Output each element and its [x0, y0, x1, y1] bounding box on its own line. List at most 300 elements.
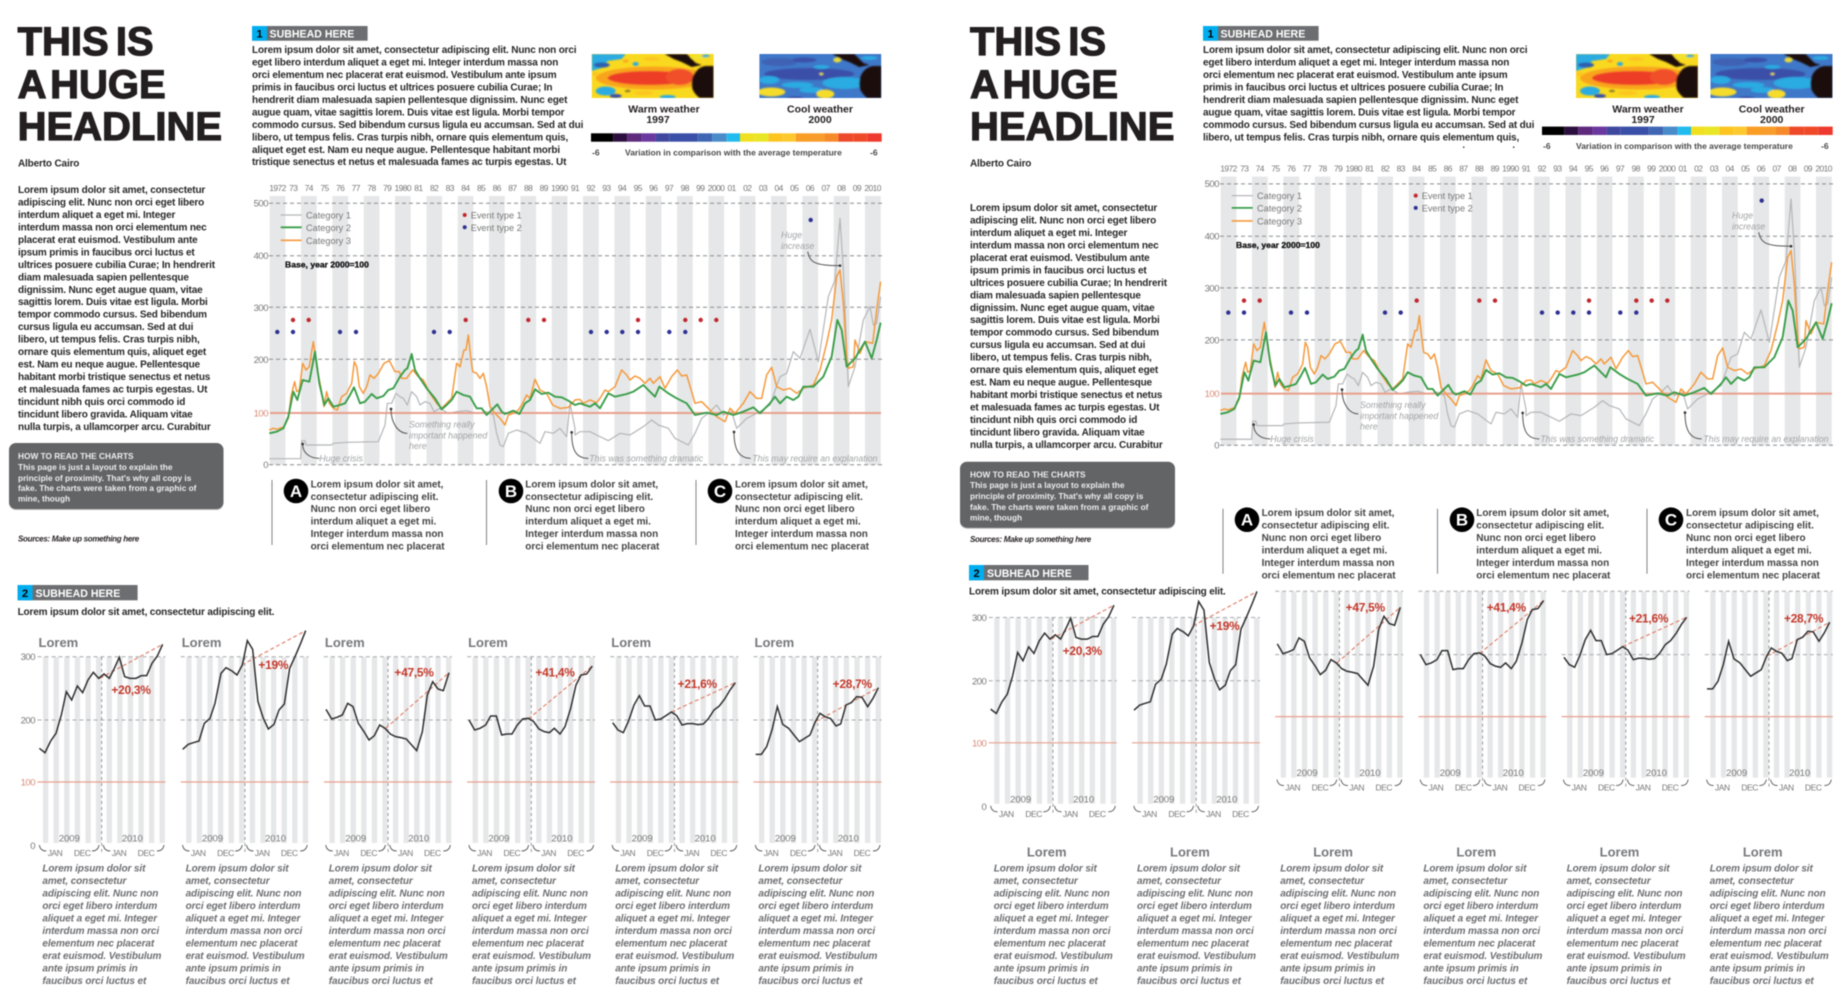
year axis: 92: [587, 183, 596, 193]
body text column: et malesuada fames ac turpis egestas. Ut: [18, 385, 208, 396]
small chart 4: [1418, 591, 1546, 793]
note C: Nunc non orci eget libero: [735, 504, 855, 515]
chart captions: adipiscing elit. Nunc non: [42, 889, 158, 900]
small chart 1: 300: [972, 613, 987, 624]
body text column: libero, ut tempus felis. Cras turpis nibh,: [18, 335, 200, 346]
chart captions: adipiscing elit. Nunc non: [1280, 889, 1396, 900]
chart captions: orci eget libero interdum: [186, 901, 301, 912]
year axis: 08: [1788, 164, 1797, 174]
small chart 3: [324, 635, 452, 858]
note A: consectetur adipiscing elit.: [1262, 520, 1390, 531]
chart captions: interdum massa non orci: [329, 926, 446, 937]
intro text: primis in faucibus orci luctus et ultrices posuere cubilia Curae; In: [1203, 82, 1503, 93]
small chart 6: [754, 635, 882, 858]
chart captions: Lorem ipsum dolor sit: [994, 864, 1097, 875]
small chart 3: JAN: [1285, 783, 1300, 793]
callout: how to read the charts: [960, 462, 1175, 529]
chart captions: amet, consectetur: [1280, 876, 1365, 887]
year axis: 93: [602, 183, 611, 193]
chart captions: amet, consectetur: [472, 876, 557, 887]
chart captions: amet, consectetur: [1567, 876, 1652, 887]
small chart 6: DEC: [790, 848, 807, 858]
note B: B: [505, 482, 517, 501]
chart captions: aliquet a eget mi. Integer: [186, 914, 301, 925]
map: cool weather: Cool weather: [787, 104, 853, 116]
value axis: 500: [1205, 179, 1219, 190]
body text column: interdum massa non orci elementum nec: [18, 222, 207, 233]
year axis: 92: [1538, 164, 1547, 174]
note B: Nunc non orci eget libero: [525, 504, 645, 515]
legend: [281, 210, 522, 246]
body text column: habitant morbi tristique senectus et netus: [18, 372, 211, 383]
legend: Category 2: [306, 223, 351, 233]
chart captions: interdum massa non orci: [1423, 926, 1540, 937]
small chart 3: Lorem: [325, 635, 365, 650]
intro text: commodo cursus. Sed bibendum cursus ligula eu accumsan. Sed at dui: [252, 120, 584, 131]
title: THIS IS: [18, 20, 154, 64]
year axis: 95: [634, 183, 643, 193]
year axis: 03: [759, 183, 768, 193]
small chart 3: JAN: [334, 848, 349, 858]
intro text: commodo cursus. Sed bibendum cursus ligula eu accumsan. Sed at dui: [1203, 120, 1535, 131]
chart captions: elementum nec placerat: [994, 939, 1106, 950]
legend: Event type 1: [1422, 191, 1473, 201]
small chart 5: DEC: [1598, 783, 1615, 793]
title: [970, 20, 1174, 149]
year axis: 1972: [1220, 164, 1238, 174]
intro text: orci elementum nec placerat erat euismod. Vestibulum ante ipsum: [252, 70, 557, 81]
small chart 2: +19%: [1210, 619, 1240, 633]
chart captions: elementum nec placerat: [42, 939, 155, 950]
annotations: Huge: [1732, 211, 1753, 221]
subhead 2 intro: Lorem ipsum dolor sit amet, consectetur adipiscing elit.: [969, 586, 1226, 598]
chart captions: adipiscing elit. Nunc non: [1567, 889, 1682, 900]
small chart 5: 2010: [1646, 768, 1667, 779]
note A: interdum aliquet a eget mi.: [1262, 545, 1387, 556]
sources: Sources: Make up something here: [970, 535, 1092, 544]
intro text: augue quam, vitae sagittis lorem. Duis vitae est ligula. Morbi tempor: [1203, 107, 1516, 118]
chart captions: aliquet a eget mi. Integer: [42, 914, 158, 925]
chart captions: Lorem ipsum dolor sit: [615, 864, 719, 875]
year axis: 09: [853, 183, 862, 193]
small chart 1: DEC: [138, 848, 155, 858]
small chart 3: JAN: [1349, 783, 1364, 793]
annotations: important happened: [1360, 411, 1439, 421]
intro text: orci elementum nec placerat erat euismod. Vestibulum ante ipsum: [1203, 70, 1508, 81]
small chart 5: [610, 635, 738, 858]
small chart 1: JAN: [112, 848, 127, 858]
year axis: 02: [743, 183, 752, 193]
chart captions: Lorem ipsum dolor sit: [472, 864, 576, 875]
line chart: main: [254, 183, 882, 471]
colour legend: [591, 133, 882, 158]
body text column: est. Nam eu neque augue. Pellentesque: [970, 378, 1153, 389]
small chart 5: Lorem: [611, 635, 651, 650]
subhead 1: SUBHEAD HERE: [1220, 28, 1305, 40]
value axis: 500: [254, 198, 268, 210]
chart captions: interdum massa non orci: [1137, 926, 1254, 937]
year axis: 2010: [864, 183, 882, 193]
annotations: This was something dramatic: [589, 453, 704, 463]
body text column: Lorem ipsum dolor sit amet, consectetur: [18, 185, 205, 196]
chart captions: elementum nec placerat: [1280, 939, 1393, 950]
chart captions: aliquet a eget mi. Integer: [472, 914, 588, 925]
body text column: tincidunt nibh quis orci commodo id: [970, 415, 1137, 426]
small chart 4: 2009: [488, 834, 509, 844]
note C: orci elementum nec placerat: [1686, 570, 1821, 581]
chart captions: erat euismod. Vestibulum: [758, 951, 878, 962]
byline: Alberto Cairo: [18, 158, 79, 170]
chart captions: orci eget libero interdum: [1137, 901, 1252, 912]
note C: Lorem ipsum dolor sit amet,: [735, 479, 868, 490]
value axis: 300: [254, 303, 268, 314]
chart captions: interdum massa non orci: [42, 926, 159, 937]
note C: consectetur adipiscing elit.: [735, 492, 863, 503]
chart captions: interdum massa non orci: [1567, 926, 1684, 937]
small chart 2: JAN: [191, 848, 206, 858]
chart captions: aliquet a eget mi. Integer: [1423, 914, 1539, 925]
chart captions: elementum nec placerat: [1423, 939, 1536, 950]
note C: Lorem ipsum dolor sit amet,: [1686, 508, 1819, 519]
callout: how to read the charts: mine, though: [18, 494, 70, 504]
chart captions: adipiscing elit. Nunc non: [472, 889, 588, 900]
annotations: here: [1360, 422, 1378, 432]
small chart 3: JAN: [398, 848, 413, 858]
year axis: 74: [1256, 164, 1265, 174]
map: warm weather: 1997: [1631, 114, 1655, 126]
chart captions: orci eget libero interdum: [758, 901, 873, 912]
note B: interdum aliquet a eget mi.: [1476, 545, 1602, 556]
year axis: 1980: [395, 183, 412, 193]
year axis: 84: [1412, 164, 1421, 174]
note B: Integer interdum massa non: [525, 529, 658, 540]
chart captions: elementum nec placerat: [1567, 939, 1679, 950]
year axis: 08: [837, 183, 846, 193]
small chart 1: 2010: [122, 834, 143, 844]
chart captions: interdum massa non orci: [1280, 926, 1397, 937]
annotations: This was something dramatic: [1540, 434, 1655, 444]
year axis: 91: [1522, 164, 1531, 174]
small chart 5: [1562, 591, 1690, 793]
small chart 1: JAN: [1063, 809, 1078, 819]
small chart 1: 200: [972, 676, 987, 687]
body text column: cursus ligula eu accumsan. Sed at dui: [18, 322, 194, 333]
year axis: 91: [571, 183, 580, 193]
body text column: ipsum primis in faucibus orci luctus et: [970, 265, 1147, 276]
annotations: important happened: [409, 430, 488, 440]
note A: Lorem ipsum dolor sit amet,: [1262, 508, 1395, 519]
year axis: 76: [1287, 164, 1296, 174]
body text column: est. Nam eu neque augue. Pellentesque: [18, 360, 201, 371]
small chart 3: +47,5%: [1346, 600, 1386, 614]
callout: how to read the charts: This page is just a layout to explain the: [970, 480, 1125, 490]
year axis: 07: [821, 183, 831, 193]
year axis: 74: [305, 183, 314, 193]
value axis: 400: [254, 251, 268, 262]
intro text: tristique senectus et netus et malesuada fames ac turpis egestas. Ut: [252, 157, 567, 168]
year axis: 78: [1318, 164, 1327, 174]
small chart 1: Lorem: [38, 635, 78, 650]
colour legend: -6: [592, 148, 600, 158]
event markers: [1226, 198, 1764, 315]
chart captions: erat euismod. Vestibulum: [1423, 951, 1543, 962]
annotations: here: [409, 441, 427, 451]
small chart 1: 0: [30, 841, 35, 852]
note B: Lorem ipsum dolor sit amet,: [525, 479, 658, 490]
note A: A: [290, 482, 302, 501]
chart captions: interdum massa non orci: [1710, 926, 1827, 937]
note B: orci elementum nec placerat: [525, 542, 660, 553]
map: cool weather: [1708, 54, 1832, 126]
colour legend: -6: [1821, 141, 1829, 151]
chart captions: orci eget libero interdum: [472, 901, 587, 912]
small chart 4: JAN: [1492, 783, 1508, 793]
small chart 3: DEC: [1375, 783, 1392, 793]
small chart 2: 2009: [1153, 794, 1174, 805]
small chart 6: +28,7%: [1784, 612, 1824, 626]
small chart 6: 2010: [838, 834, 859, 844]
sources: Sources: Make up something here: [18, 535, 140, 544]
year axis: 79: [1334, 164, 1343, 174]
year axis: 06: [806, 183, 815, 193]
small chart 2: [181, 631, 309, 858]
annotations: Huge: [781, 230, 802, 240]
year axis: 05: [1741, 164, 1750, 174]
annotations: This may require an explanation: [1703, 434, 1829, 444]
legend: Category 3: [1257, 217, 1302, 227]
year axis: 73: [289, 183, 298, 193]
chart captions: elementum nec placerat: [472, 939, 585, 950]
chart captions: aliquet a eget mi. Integer: [1280, 914, 1396, 925]
chart captions: ante ipsum primis in: [329, 963, 424, 974]
body text column: dignissim. Nunc eget augue quam, vitae: [970, 303, 1155, 314]
year axis: 02: [1694, 164, 1703, 174]
chart captions: ante ipsum primis in: [1137, 963, 1232, 974]
chart captions: aliquet a eget mi. Integer: [1710, 914, 1826, 925]
body text column: placerat erat euismod. Vestibulum ante: [18, 235, 198, 246]
year axis: 88: [1475, 164, 1484, 174]
chart captions: Lorem ipsum dolor sit: [1280, 864, 1384, 875]
chart captions: faucibus orci luctus et: [758, 976, 863, 987]
data lines: [1220, 199, 1832, 439]
year axis: 75: [1271, 164, 1280, 174]
year axis: 98: [681, 183, 690, 193]
chart captions: orci eget libero interdum: [1567, 901, 1682, 912]
value axis: 300: [1205, 284, 1219, 295]
chart captions: adipiscing elit. Nunc non: [1423, 889, 1539, 900]
year axis: 77: [352, 183, 361, 193]
chart captions: amet, consectetur: [758, 876, 843, 887]
year axis: 89: [540, 183, 549, 193]
intro text: eget libero interdum aliquet a eget mi. Integer interdum massa non: [1203, 57, 1509, 68]
small chart 2: Lorem: [182, 635, 221, 650]
chart captions: elementum nec placerat: [1137, 939, 1250, 950]
note A: Lorem ipsum dolor sit amet,: [311, 479, 444, 490]
small chart 6: 2009: [775, 834, 796, 844]
value axis: 200: [1205, 336, 1219, 347]
small chart 3: DEC: [360, 848, 377, 858]
note C: interdum aliquet a eget mi.: [1686, 545, 1812, 556]
legend: Event type 2: [471, 223, 522, 233]
small chart 6: [1705, 591, 1833, 793]
small chart 1: JAN: [999, 809, 1014, 819]
note B: Lorem ipsum dolor sit amet,: [1476, 508, 1609, 519]
year axis: 2010: [1815, 164, 1833, 174]
intro text: libero, ut tempus felis. Cras turpis nibh, ornare quis elementum quis,: [252, 132, 568, 143]
legend: Category 2: [1257, 204, 1302, 214]
chart captions: ante ipsum primis in: [1710, 963, 1805, 974]
year axis: 73: [1240, 164, 1249, 174]
byline: Alberto Cairo: [970, 158, 1031, 170]
small chart 1: +20,3%: [111, 683, 151, 697]
small chart 5: 2009: [1583, 768, 1604, 779]
small chart 1: DEC: [74, 848, 91, 858]
map: warm weather: [592, 54, 714, 126]
year axis: 83: [446, 183, 455, 193]
map: cool weather: [757, 54, 881, 126]
small chart 4: [467, 635, 595, 858]
chart headings: Lorem: [1743, 844, 1783, 860]
small chart 4: JAN: [1428, 783, 1444, 793]
subhead 2: 2: [973, 568, 980, 580]
subhead 1: SUBHEAD HERE: [270, 28, 354, 40]
map: cool weather: Cool weather: [1739, 104, 1805, 116]
annotations: [1270, 211, 1829, 444]
value axis: [254, 198, 268, 471]
chart captions: amet, consectetur: [994, 876, 1079, 887]
year axis: 95: [1585, 164, 1594, 174]
body text column: tempor commodo cursus. Sed bibendum: [970, 328, 1159, 339]
chart captions: ante ipsum primis in: [1567, 963, 1662, 974]
event markers: [275, 218, 813, 334]
year axis: 83: [1397, 164, 1406, 174]
chart captions: erat euismod. Vestibulum: [186, 951, 305, 962]
small chart 2: DEC: [1232, 809, 1249, 819]
chart headings: Lorem: [1027, 844, 1067, 860]
callout: how to read the charts: principle of proximity. That's why all copy is: [970, 491, 1144, 501]
map: warm weather: [1576, 54, 1698, 126]
small chart 6: JAN: [1715, 783, 1730, 793]
leaders: [301, 252, 841, 458]
chart captions: erat euismod. Vestibulum: [1280, 951, 1399, 962]
subhead 1: [1203, 26, 1319, 41]
subhead 2: [18, 585, 138, 600]
chart captions: faucibus orci luctus et: [1710, 976, 1814, 987]
small chart 1: 2009: [59, 834, 80, 844]
year axis: 82: [1381, 164, 1390, 174]
year axis: 09: [1804, 164, 1813, 174]
title: A HUGE: [970, 63, 1118, 107]
chart headings: Lorem: [1600, 844, 1639, 860]
chart captions: erat euismod. Vestibulum: [1567, 951, 1686, 962]
annotations: increase: [781, 241, 814, 251]
legend: Category 1: [306, 210, 351, 220]
small chart 5: DEC: [710, 848, 727, 858]
small chart 2: DEC: [281, 848, 298, 858]
small chart 1: JAN: [48, 848, 63, 858]
body text column: diam malesuada sapien pellentesque: [970, 290, 1141, 301]
body text column: nulla turpis, a ullamcorper arcu. Curabitur: [970, 440, 1163, 451]
body text column: cursus ligula eu accumsan. Sed at dui: [970, 340, 1146, 351]
legend: Event type 1: [471, 210, 522, 220]
subhead 2: [969, 565, 1088, 580]
small chart 2: +19%: [258, 658, 289, 672]
small chart 2: JAN: [1142, 809, 1157, 819]
body text column: sagittis lorem. Duis vitae est ligula. Morbi: [18, 297, 208, 308]
note A: orci elementum nec placerat: [1262, 570, 1396, 581]
chart captions: ante ipsum primis in: [42, 963, 138, 974]
small chart 6: DEC: [1805, 783, 1822, 793]
year axis: 85: [477, 183, 486, 193]
note B: consectetur adipiscing elit.: [1476, 520, 1604, 531]
body text column: habitant morbi tristique senectus et netus: [970, 390, 1163, 401]
small chart 5: JAN: [1636, 783, 1651, 793]
note C: C: [1665, 511, 1677, 530]
year axis: 94: [1569, 164, 1578, 174]
small chart 1: 200: [21, 716, 35, 726]
chart headings: [1027, 844, 1783, 860]
small chart 2: DEC: [217, 848, 234, 858]
leaders: [1252, 232, 1792, 439]
data lines: [269, 218, 881, 459]
small chart 2: 2009: [202, 834, 223, 844]
chart captions: ante ipsum primis in: [615, 963, 710, 974]
body text column: nulla turpis, a ullamcorper arcu. Curabitur: [18, 422, 211, 433]
year axis: 99: [1647, 164, 1656, 174]
value axis: 200: [254, 355, 268, 366]
small chart 1: 100: [972, 738, 987, 749]
small chart 3: DEC: [1312, 783, 1329, 793]
chart captions: adipiscing elit. Nunc non: [615, 889, 731, 900]
chart captions: amet, consectetur: [1137, 876, 1222, 887]
note A: A: [1241, 511, 1253, 530]
chart captions: aliquet a eget mi. Integer: [615, 914, 731, 925]
subhead 2 intro: Lorem ipsum dolor sit amet, consectetur adipiscing elit.: [18, 607, 275, 618]
note B: [1450, 507, 1611, 581]
year axis: 1980: [1346, 164, 1363, 174]
chart captions: Lorem ipsum dolor sit: [1423, 864, 1527, 875]
chart captions: erat euismod. Vestibulum: [1137, 951, 1256, 962]
small chart 5: JAN: [620, 848, 635, 858]
chart captions: ante ipsum primis in: [758, 963, 854, 974]
chart headings: Lorem: [1170, 844, 1210, 860]
chart captions: Lorem ipsum dolor sit: [1137, 864, 1241, 875]
callout: how to read the charts: HOW TO READ THE CHARTS: [970, 470, 1086, 480]
subhead 2: SUBHEAD HERE: [987, 568, 1072, 580]
legend: Category 3: [306, 236, 351, 246]
year axis: 99: [696, 183, 705, 193]
chart captions: interdum massa non orci: [994, 926, 1111, 937]
year axis: 84: [461, 183, 470, 193]
chart captions: faucibus orci luctus et: [1567, 976, 1671, 987]
annotations: increase: [1732, 222, 1765, 232]
small chart 2: 2010: [265, 834, 286, 844]
year axis: 2000: [708, 183, 725, 193]
chart captions: ante ipsum primis in: [472, 963, 567, 974]
callout: how to read the charts: mine, though: [970, 513, 1022, 523]
year axis: 01: [727, 183, 737, 193]
chart captions: erat euismod. Vestibulum: [1710, 951, 1829, 962]
small chart 4: +41,4%: [1487, 600, 1527, 614]
small chart 6: JAN: [1779, 783, 1794, 793]
chart captions: Lorem ipsum dolor sit: [42, 864, 146, 875]
small chart 2: JAN: [1206, 809, 1221, 819]
small chart 6: JAN: [828, 848, 843, 858]
small chart 4: JAN: [477, 848, 492, 858]
body text column: interdum massa non orci elementum nec: [970, 240, 1159, 251]
small chart 2: DEC: [1168, 809, 1185, 819]
year axis: 85: [1428, 164, 1437, 174]
